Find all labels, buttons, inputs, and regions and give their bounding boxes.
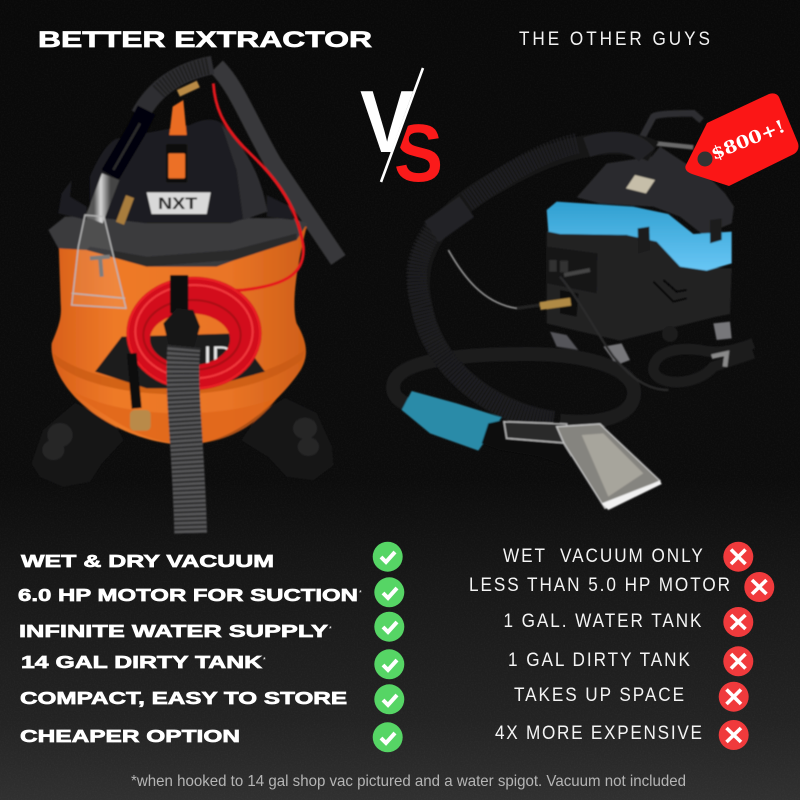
brand label: ID [203,343,233,370]
list: better extractor features: 14 GAL DIRTY TANK [21,652,263,672]
hose end and brass connector [130,353,151,431]
list: better extractor features: COMPACT, EASY TO STORE [20,688,347,708]
blue band [547,202,732,271]
side handles [58,180,293,220]
control panel [547,247,597,317]
latches [638,218,722,253]
list: better extractor features: INFINITE WATER SUPPLY [19,621,328,641]
caster caps [42,418,319,460]
heading: the other guys: THE OTHER GUYS [519,27,710,49]
clear extraction tool [504,422,662,510]
lid [48,217,307,267]
list: other guys drawbacks: 1 GAL. WATER TANK [504,609,702,631]
NXT badge [147,192,211,214]
blue hose sleeve [402,391,502,451]
lower vacuum hose [183,347,191,533]
NXT badge: NXT [158,194,197,213]
black wand [110,110,147,175]
versus mark [360,66,443,199]
front right caster foot [242,398,333,480]
brand label [95,333,265,388]
machine hood [577,147,734,235]
list: better extractor features: WET & DRY VACUUM [21,551,274,571]
price tag [685,93,798,186]
red hose coil [126,277,262,390]
chrome tube [94,177,111,220]
list: other guys drawbacks: TAKES UP SPACE [514,683,684,705]
list: other guys drawbacks [469,544,730,743]
icons: red cross marks [719,542,774,750]
list: other guys drawbacks: 1 GAL DIRTY TANK [508,648,691,670]
versus mark: V [360,72,414,171]
wheels [550,322,732,365]
brass fitting [178,84,198,93]
machine handle [642,113,702,138]
velcro strap [170,275,188,313]
motor head [90,120,267,223]
tool handle [482,420,573,465]
list: better extractor features: * [329,626,332,633]
list: better extractor features: 6.0 HP MOTOR FOR SUCTION [18,585,358,605]
footnote: *when hooked to 14 gal shop vac pictured and a water spigot. Vacuum not included [131,773,686,790]
list: better extractor features: * [359,590,362,597]
price tag: $800+! [708,117,788,165]
product photo: orange shop vac extractor [32,65,338,533]
list: other guys drawbacks: 4X MORE EXPENSIVE [495,721,702,743]
front left caster foot [32,403,123,487]
main ribbed hose [417,142,653,422]
list: better extractor features: * [263,657,266,664]
rear grey hose [217,67,338,260]
list: other guys drawbacks: WET VACUUM ONLY [503,544,703,566]
list: better extractor features [18,551,362,746]
lower body [547,232,732,341]
warning decal [626,175,655,193]
list: other guys drawbacks: LESS THAN 5.0 HP MOTOR [469,573,730,595]
orange power switch [166,100,187,183]
clear cleaning tool [72,215,126,308]
red cable lead [187,83,303,290]
versus mark: S [394,108,443,199]
upper hose [140,65,213,115]
list: better extractor features: CHEAPER OPTION [20,726,240,746]
product photo: blue competitor extractor [393,113,753,510]
hose cuff [163,308,200,350]
icons: green check marks [373,542,404,752]
lower hose ring [393,354,634,423]
power cord bundle [653,343,753,382]
orange drum [51,220,307,445]
heading: better extractor: BETTER EXTRACTOR [38,27,372,52]
black cable [560,277,668,390]
wire and brass connector [448,250,571,308]
body chevrons [653,280,687,302]
